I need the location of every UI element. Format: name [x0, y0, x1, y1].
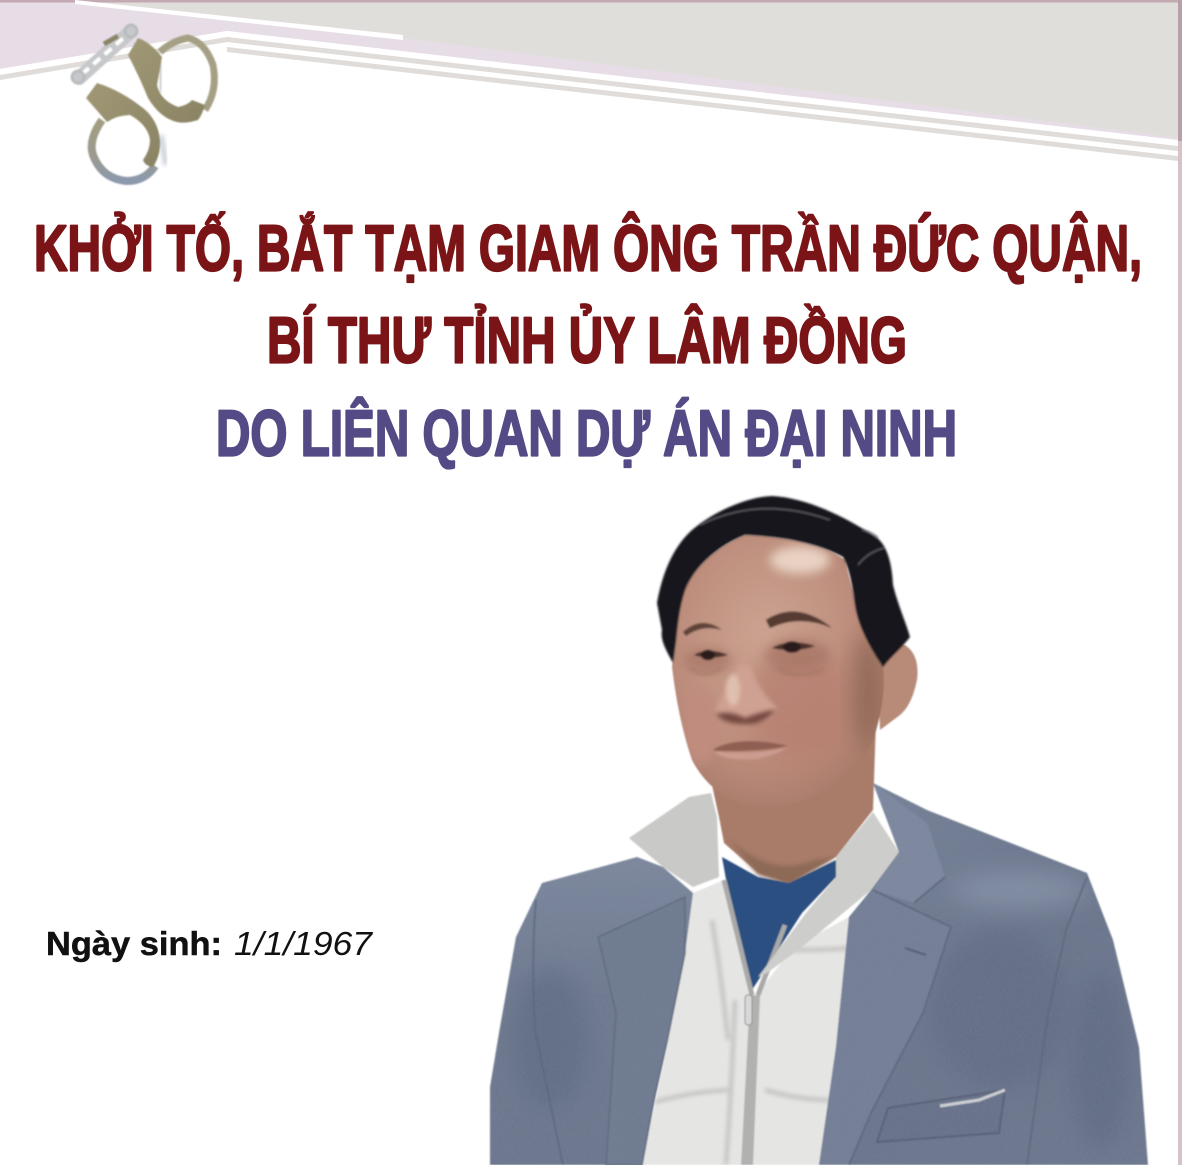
upper cuff — [128, 38, 214, 123]
jacket — [490, 780, 1150, 1165]
mouth — [714, 741, 788, 760]
eyebrows — [683, 623, 722, 636]
face — [672, 535, 884, 808]
icon: handcuffs — [72, 25, 214, 181]
date of birth: 1/1/1967 — [234, 925, 374, 962]
lower cuff — [86, 83, 166, 181]
eye sockets — [684, 648, 732, 672]
breast pocket — [877, 1090, 1005, 1142]
eyes — [694, 642, 815, 660]
eye bags — [690, 668, 825, 675]
cheek shading — [750, 656, 844, 757]
jacket shading — [512, 870, 1130, 1150]
title: line 2: BÍ THƯ TỈNH ỦY LÂM ĐỒNG — [267, 304, 907, 376]
hair highlights — [700, 509, 884, 565]
neck — [712, 720, 876, 883]
date of birth: Ngày sinh: — [46, 925, 222, 962]
vest shading — [655, 920, 848, 1165]
right lapel — [819, 783, 951, 1165]
hair — [657, 496, 910, 667]
fabric texture — [520, 954, 1121, 1140]
ear — [878, 645, 918, 730]
portrait — [490, 496, 1150, 1165]
chain — [72, 25, 137, 83]
vest collars — [629, 793, 719, 887]
vest body — [642, 880, 849, 1165]
forehead highlight — [770, 546, 830, 574]
sleeve seams — [533, 877, 1087, 1165]
nose — [716, 665, 777, 722]
turtleneck — [722, 857, 836, 993]
left lapel — [598, 897, 685, 1165]
zipper — [724, 880, 785, 1165]
